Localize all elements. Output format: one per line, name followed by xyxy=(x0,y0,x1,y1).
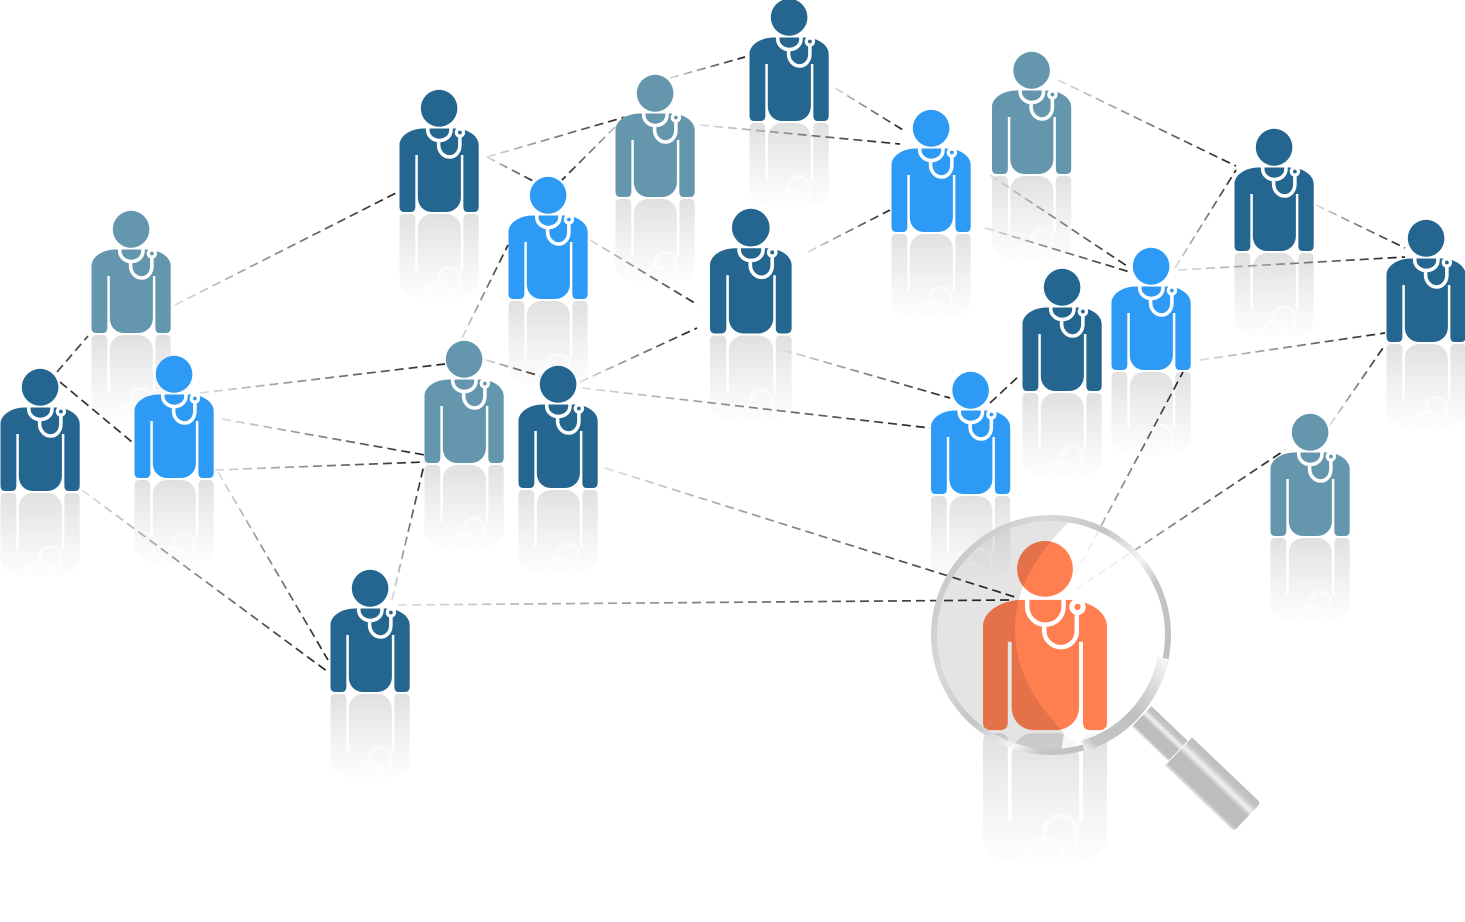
doctor 8 xyxy=(892,110,971,232)
ring thick collar xyxy=(1083,658,1163,746)
doctor 10 xyxy=(1234,129,1314,251)
doctor 12 xyxy=(1112,248,1191,370)
connection lines xyxy=(57,57,1405,672)
handle neck xyxy=(1132,706,1188,761)
lens glass highlight xyxy=(1062,531,1130,748)
doctor 18 xyxy=(710,209,792,333)
orange doctor xyxy=(983,541,1107,730)
doctor 6 xyxy=(616,75,695,197)
doctor 7 xyxy=(750,0,829,121)
doctor 3 xyxy=(134,356,214,478)
doctor 2 xyxy=(92,211,171,333)
doctor 19 xyxy=(1270,414,1350,536)
doctor 1 xyxy=(0,369,80,491)
doctor 17 xyxy=(330,570,410,692)
doctor 15 xyxy=(424,341,504,463)
lens shaded crescent xyxy=(937,521,1068,749)
magnifying glass xyxy=(920,510,1261,831)
doctor 5 xyxy=(508,177,588,299)
doctor 4 xyxy=(400,90,479,212)
doctor 14 xyxy=(931,372,1010,494)
doctor 13 xyxy=(1022,269,1102,391)
doctor 16 xyxy=(518,366,598,488)
doctor network figures xyxy=(0,0,1465,692)
handle grip xyxy=(1165,737,1261,831)
doctor 11 xyxy=(1386,220,1465,342)
doctor 9 xyxy=(992,52,1071,174)
lens ring xyxy=(934,518,1168,752)
